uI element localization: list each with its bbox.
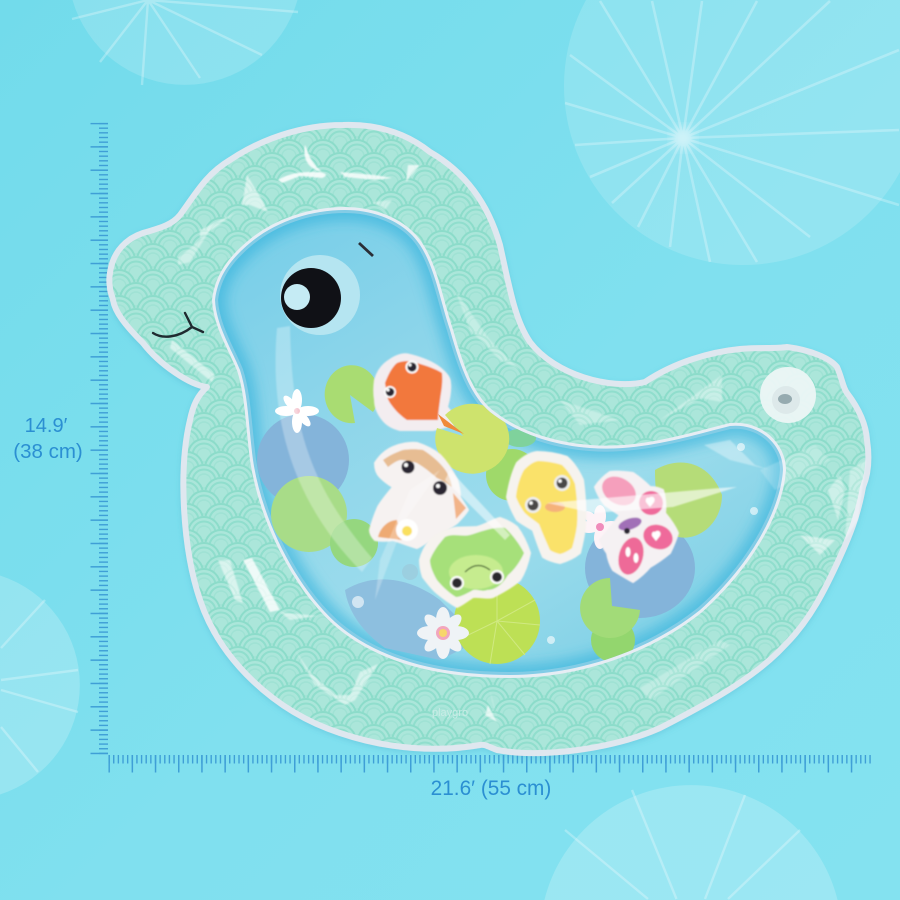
sticker: butterfly (595, 471, 678, 582)
horizontal ruler (108, 755, 871, 773)
brand mark: playgro (432, 707, 468, 719)
lily pad: bottom right (580, 578, 640, 662)
water lily: right (584, 505, 615, 549)
water bubbles (352, 443, 758, 644)
fish tail (438, 414, 464, 434)
lily pad: top (325, 365, 379, 423)
decorative lily pad: top left (72, 0, 298, 85)
edge glow (215, 210, 783, 675)
icon: eyebrow mark (359, 243, 373, 256)
decorative lily pad: bottom (544, 785, 838, 900)
plastic reflections in window (276, 326, 770, 600)
lily pad: yellow green (435, 404, 509, 474)
sticker: duckling (507, 452, 585, 563)
lily pad: bottom large (454, 578, 540, 664)
decorative lily pad: left (0, 576, 80, 794)
icon: beak mark (153, 313, 203, 337)
sticker: frog (420, 518, 530, 607)
vertical ruler (90, 123, 108, 756)
icon: duck eye (280, 255, 360, 335)
water lily: bottom (417, 607, 469, 659)
suction valve (760, 367, 816, 423)
mat outer body (109, 125, 868, 753)
lily pad: left large (271, 476, 347, 552)
sticker: goldfish (374, 354, 460, 430)
height label metric: (38 cm) (13, 440, 83, 463)
plastic reflections on ring (170, 145, 866, 730)
water lily: left (275, 389, 319, 433)
lily pad: behind duck (486, 449, 528, 500)
water scene (215, 210, 783, 675)
sticker: hamster (370, 443, 468, 548)
blue blobs (257, 414, 695, 618)
lily pad: centre small (508, 429, 536, 447)
decorative lily pad: top right (564, 0, 900, 265)
width label: 21.6′ (55 cm) (431, 777, 551, 800)
duck water mat (109, 125, 868, 753)
lily pad: left behind (330, 519, 378, 567)
lily pad: right (655, 462, 722, 538)
water window (215, 210, 783, 675)
height label: 14.9′ (25, 415, 68, 437)
lower blue shape (345, 580, 464, 660)
